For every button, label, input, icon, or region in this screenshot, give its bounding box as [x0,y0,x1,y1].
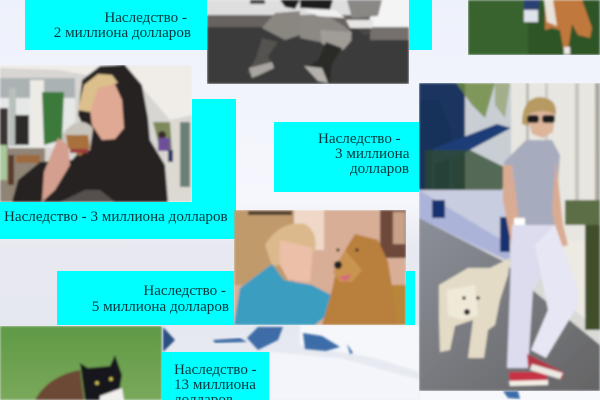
cyan panel: 13 million [162,352,269,400]
photo: woman in fur hood with small dog [0,65,192,202]
caption: 5 million: 5 миллиона долларов [92,299,229,315]
caption: 13 million: Наследство - [174,362,257,378]
photo: dog on grass [468,0,600,55]
photo: woman in sunglasses walking white dog [419,83,600,391]
caption: 3 million: Наследство - 3 миллиона долларов [4,209,228,225]
cyan panel: left photo backing [0,99,236,239]
caption: 2 million: Наследство - [104,10,187,26]
caption: 3 million: долларов [350,161,409,177]
cyan panel: 3 million right [274,122,419,192]
caption: 3 million: 3 миллиона [335,146,410,162]
caption: 5 million: Наследство - [143,283,226,299]
cyan panel: 2 million [25,0,432,50]
caption: 2 million: 2 миллиона долларов [54,25,191,41]
photo: black and white people with dogs [207,0,409,84]
photo: elderly woman with golden retriever [234,210,406,325]
photo: black and tan cat on grass [0,326,162,400]
caption: 3 million: Наследство - [318,131,401,147]
caption: 13 million: 13 миллиона [174,377,256,393]
cyan panel: 5 million [57,271,415,325]
